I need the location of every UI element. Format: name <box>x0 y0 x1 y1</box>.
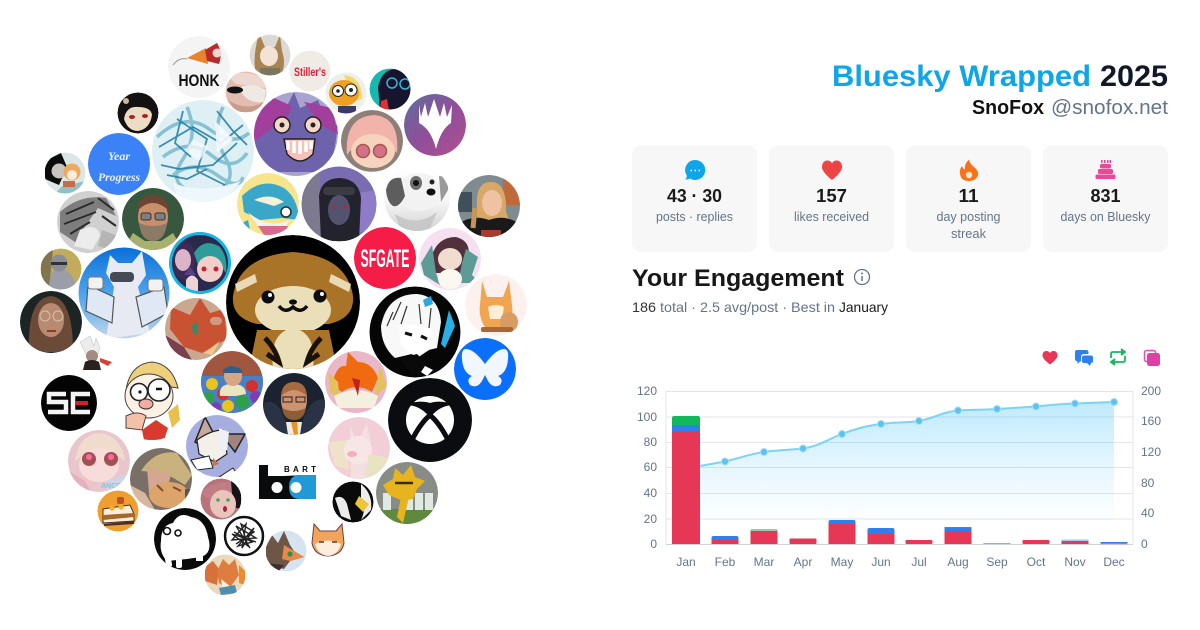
month labels <box>676 555 1125 569</box>
avatar: orange fox sparkle <box>465 274 527 336</box>
panel: posts and replies <box>632 145 757 252</box>
bar: Nov <box>1062 540 1088 544</box>
bar: Dec <box>1100 542 1128 544</box>
avatar: fern girl <box>419 228 481 290</box>
month labels: Dec <box>1103 555 1125 569</box>
panel: days on Bluesky <box>1043 145 1168 252</box>
bar: Sep <box>984 543 1010 544</box>
avatar: year progress: Year <box>108 149 130 163</box>
avatar: fox face sticker <box>312 524 344 556</box>
icon: speech bubble <box>685 160 705 180</box>
right axis labels: 120 <box>1141 445 1161 459</box>
avatar: periwinkle cat creature <box>186 415 248 477</box>
grid lines <box>666 391 1133 544</box>
bar: Apr <box>790 538 816 544</box>
right axis labels: 40 <box>1141 506 1155 520</box>
bar: May <box>828 520 856 544</box>
month labels: Sep <box>986 555 1008 569</box>
engagement summary: 186 <box>632 299 656 315</box>
avatar: cake slice <box>98 490 138 532</box>
icon: legend repost <box>1111 349 1125 365</box>
month labels: Oct <box>1027 555 1046 569</box>
left axis labels: 20 <box>644 512 657 526</box>
icon: legend quote <box>1144 350 1160 366</box>
left axis labels <box>637 384 657 551</box>
avatar: bunny character <box>250 33 290 76</box>
icon: heart <box>822 160 842 180</box>
avatar cluster <box>20 33 527 596</box>
avatar: purple unicorn monster <box>254 92 338 176</box>
bar: Jun <box>868 528 894 544</box>
avatar: SC logo <box>41 375 97 431</box>
month labels: Feb <box>715 555 736 569</box>
cumulative area <box>686 402 1114 544</box>
user name and handle <box>972 97 1168 119</box>
panel: likes received: 157 <box>816 186 847 206</box>
bar: Jul <box>906 540 932 544</box>
right axis labels: 160 <box>1141 414 1161 428</box>
title: Bluesky Wrapped <box>832 60 1091 93</box>
left axis labels: 60 <box>644 460 657 474</box>
avatar: laughing man fur coat <box>263 373 325 435</box>
avatar: armored knight <box>40 248 82 290</box>
avatar: vader with glasses <box>370 68 412 110</box>
month labels: Jan <box>676 555 696 569</box>
avatar: penguin globe <box>332 482 374 522</box>
avatar: anime girl manga <box>370 286 460 378</box>
heading: your engagement: Your Engagement <box>632 265 844 292</box>
panel: likes received: likes received <box>794 210 869 224</box>
avatar: orange dragon badge <box>325 351 387 413</box>
avatar: blue swirl artwork <box>152 100 254 202</box>
avatar: otter main <box>226 235 360 369</box>
avatar: magic the gathering <box>404 94 466 156</box>
right axis labels: 200 <box>1141 384 1161 398</box>
user name and handle: SnoFox <box>972 97 1044 119</box>
bar: Aug <box>944 527 972 544</box>
panel: posts and replies: posts · replies <box>656 210 733 224</box>
month labels: Mar <box>754 555 774 569</box>
icon: cake <box>1096 160 1116 179</box>
left axis labels: 40 <box>644 486 657 500</box>
panel: days on Bluesky: 831 <box>1090 186 1120 206</box>
avatar: orca and cat <box>44 152 86 194</box>
engagement summary: total · 2.5 avg/post · Best in <box>660 299 835 315</box>
panel: day posting streak: day posting <box>936 210 1001 224</box>
avatar: pink rabbit <box>328 417 390 479</box>
avatar: bearded man green <box>122 188 184 250</box>
month labels: Apr <box>794 555 812 569</box>
avatar: orange round character <box>326 72 366 114</box>
avatar: BART logo <box>259 465 316 499</box>
panel: likes received <box>769 145 894 252</box>
panel: posts and replies: 43 · 30 <box>667 186 722 206</box>
month labels: Aug <box>947 555 969 569</box>
left axis labels: 100 <box>637 410 657 424</box>
chart: monthly engagement <box>637 384 1161 569</box>
avatar: tiny rabbit sprite <box>80 336 112 370</box>
bar: Feb <box>712 536 738 544</box>
panel: day posting streak: 11 <box>958 186 978 206</box>
avatar: woman with glasses and long hair <box>20 291 82 353</box>
month labels: May <box>831 555 853 569</box>
right axis labels: 0 <box>1141 537 1148 551</box>
avatar: grey pencil sketch <box>57 191 119 253</box>
bar: Mar <box>750 529 778 544</box>
avatar: teal hair anime pair <box>169 232 231 294</box>
left axis labels: 80 <box>644 435 657 449</box>
avatar: SFGATE: SFGATE <box>360 245 410 273</box>
avatar: Stiller's logo <box>290 50 330 92</box>
avatar: dark steampunk knight <box>302 166 376 242</box>
panel: day posting streak <box>906 145 1031 252</box>
avatar: year progress: Progress <box>98 170 140 184</box>
avatar: pink anime girl: ANCE <box>101 483 121 490</box>
icon: flame <box>960 160 978 181</box>
avatar: scribble ring <box>225 517 263 555</box>
bar: Oct <box>1022 540 1050 544</box>
title: 2025 <box>1100 60 1168 93</box>
avatar: wolf fox <box>266 530 306 572</box>
avatar: red dragon <box>165 298 227 360</box>
bar: Jan <box>672 416 700 544</box>
avatar: honk megaphone: HONK <box>178 71 220 90</box>
avatar: ball pit <box>201 351 263 413</box>
avatar: woman and cat <box>130 448 193 510</box>
icon: legend replies <box>1075 350 1093 366</box>
icon: legend heart <box>1042 351 1058 364</box>
cumulative line <box>686 398 1118 468</box>
avatar: black hair red eyes <box>118 92 158 134</box>
avatar: blue shark <box>237 173 299 235</box>
left axis labels: 0 <box>650 537 657 551</box>
right axis labels: 80 <box>1141 476 1155 490</box>
icon: info <box>854 270 870 284</box>
avatar: nose creature <box>226 72 266 112</box>
avatar: black white blob <box>154 508 216 570</box>
avatar: blonde woman bookshelf <box>458 175 520 237</box>
avatar: xbox logo <box>388 378 472 462</box>
avatar: two foxes <box>204 554 246 596</box>
avatar: pink anime girl <box>68 430 130 492</box>
avatar: SFGATE <box>354 227 416 289</box>
avatar: bluesky butterfly <box>454 338 516 400</box>
panel: day posting streak: streak <box>951 227 987 241</box>
right axis labels <box>1141 384 1161 551</box>
avatar: mauve hair girl <box>200 478 242 520</box>
month labels: Nov <box>1064 555 1086 569</box>
legend icons <box>1042 349 1160 366</box>
left axis labels: 120 <box>637 384 657 398</box>
user name and handle: @snofox.net <box>1051 97 1168 119</box>
avatar: BART logo: BART <box>284 465 316 474</box>
avatar: pink hair glasses girl <box>341 110 403 172</box>
panel: days on Bluesky: days on Bluesky <box>1060 210 1151 224</box>
stacked bars <box>672 416 1128 544</box>
avatar: Stiller's logo: Stiller's <box>294 65 326 79</box>
avatar: white dog <box>384 173 450 231</box>
avatar: kicker sun mascot <box>376 462 438 524</box>
avatar: blond cartoon boy <box>124 362 180 440</box>
avatar: honk megaphone <box>168 36 230 98</box>
engagement summary: January <box>839 299 888 315</box>
month labels: Jun <box>871 555 891 569</box>
month labels: Jul <box>911 555 927 569</box>
avatar: white fluffy creature on blue <box>78 248 170 339</box>
avatar: year progress <box>88 133 150 195</box>
engagement summary <box>632 299 888 315</box>
